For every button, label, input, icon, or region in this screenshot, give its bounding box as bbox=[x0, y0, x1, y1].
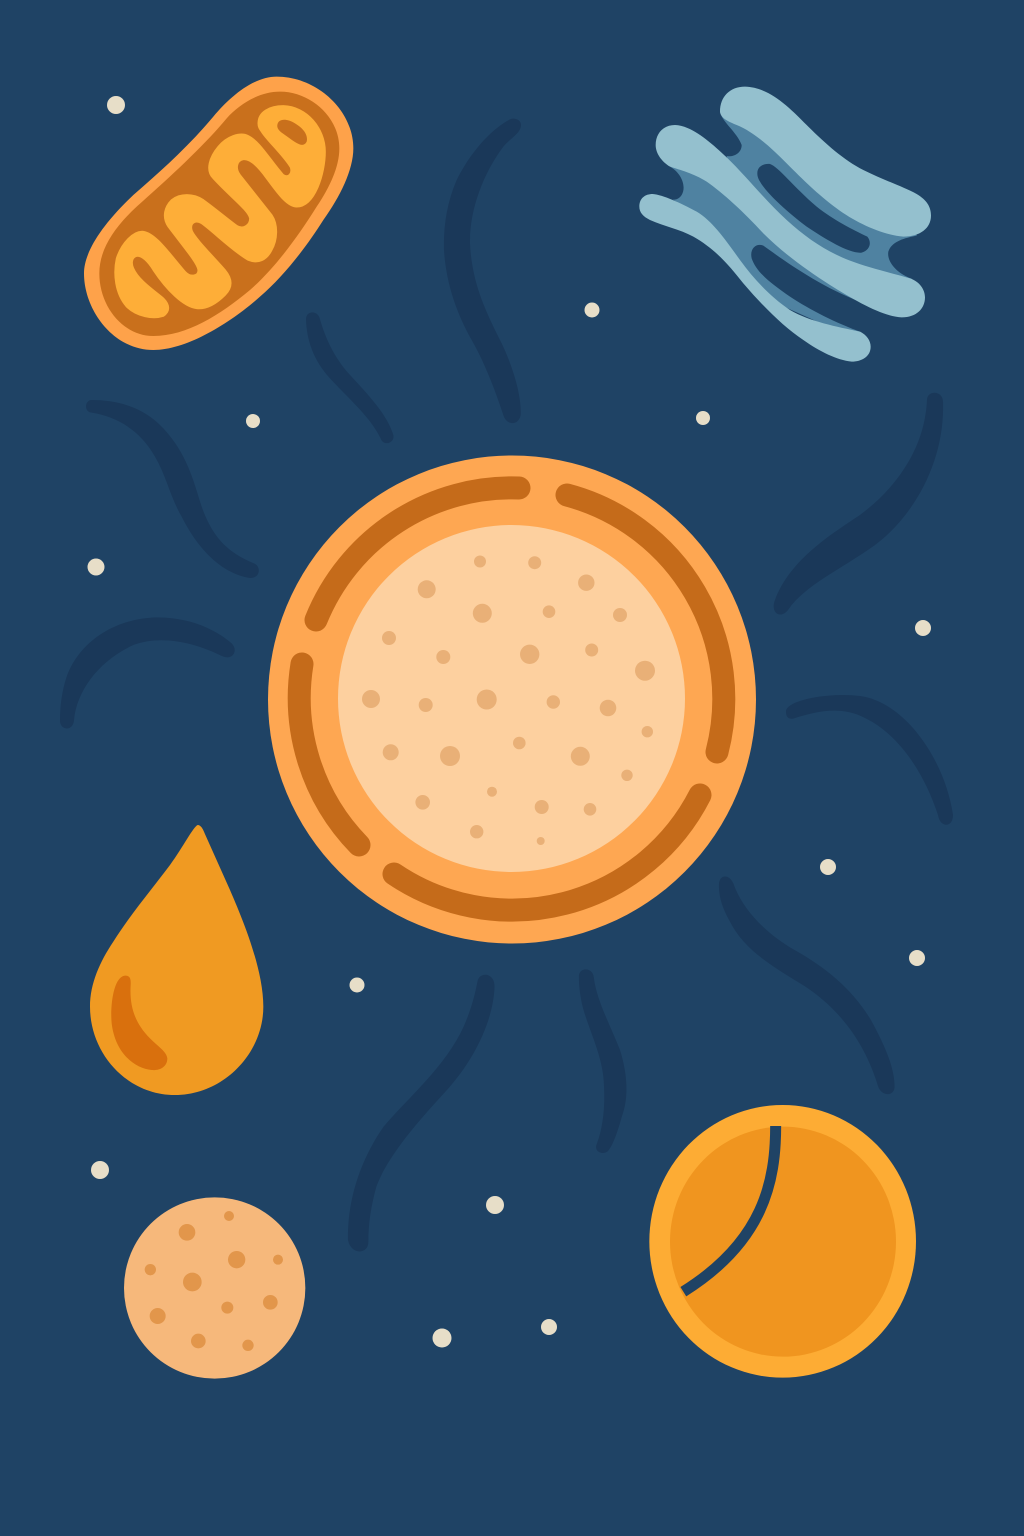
icon: small granular vesicle bbox=[124, 1197, 305, 1379]
mitochondrion outer membrane bbox=[84, 77, 353, 350]
mitochondrion matrix bbox=[99, 92, 339, 336]
endoplasmic ring segments bbox=[299, 488, 724, 910]
icon: lipid droplet bbox=[90, 825, 263, 1095]
nucleus granules bbox=[362, 556, 655, 845]
golgi cisterna top bbox=[720, 87, 931, 237]
golgi gap upper bbox=[757, 164, 870, 253]
icon: golgi apparatus bbox=[639, 87, 931, 362]
golgi connecting tissue lower bbox=[670, 167, 862, 333]
icon: mitochondrion bbox=[84, 77, 353, 350]
curved slit bbox=[683, 1126, 776, 1292]
nucleus bbox=[338, 525, 685, 872]
cream speck particles bbox=[88, 96, 931, 1348]
golgi cisterna bottom bbox=[639, 194, 871, 362]
sphere outer ring bbox=[649, 1105, 916, 1378]
golgi connecting tissue upper bbox=[720, 112, 917, 283]
mitochondrion cristae gap bbox=[277, 120, 307, 145]
dark squiggle filaments bbox=[60, 119, 953, 1251]
droplet highlight bbox=[111, 976, 167, 1070]
droplet body bbox=[90, 825, 263, 1095]
icon: ringed sphere with curved slit bbox=[649, 1105, 916, 1378]
central cell bbox=[268, 456, 756, 944]
golgi cisterna middle bbox=[656, 125, 925, 317]
cell outer body bbox=[268, 456, 756, 944]
vesicle body bbox=[124, 1197, 305, 1379]
mitochondrion cristae bbox=[115, 106, 325, 317]
vesicle granules bbox=[145, 1211, 283, 1351]
sphere inner body bbox=[670, 1127, 896, 1357]
